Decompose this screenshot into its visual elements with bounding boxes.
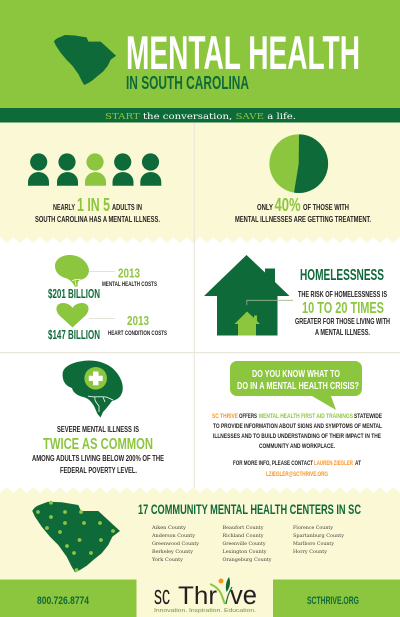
statistic text: 1 in 5: 1 IN 5 — [77, 195, 110, 215]
label: 2013 mental health costs: 2013 — [118, 266, 140, 280]
value: $147 billion: $147 BILLION — [48, 327, 100, 342]
label: 2013 heart condition costs — [108, 313, 167, 337]
cream background with zigzag edge — [0, 122, 400, 243]
statistic text: 40% — [235, 195, 371, 224]
list: counties column 1: Aiken County — [151, 525, 186, 531]
panel: poverty — [32, 360, 164, 475]
panel: crisis — [212, 361, 382, 478]
speech bubble: DO IN A MENTAL HEALTH CRISIS? — [237, 381, 359, 392]
text: training paragraph: OFFERS — [239, 413, 257, 420]
icon: row of five people — [28, 153, 161, 186]
logo: SC Thrive — [154, 577, 257, 614]
value: $201 billion: $201 BILLION — [48, 286, 100, 301]
footer: phone number — [0, 580, 136, 617]
logo: SC Thrive: sc — [154, 580, 170, 610]
tagline band: START the conversation, SAVE a life. — [105, 112, 296, 122]
list: counties column 2: Lexington County — [222, 549, 267, 555]
list: counties column 3: Florence County — [293, 525, 333, 531]
text: twice as common — [32, 425, 164, 475]
text: contact: AT — [355, 460, 362, 467]
list: counties column 3: Horry County — [293, 549, 327, 555]
list: counties column 1 — [151, 525, 199, 563]
statistic text: 1 in 5 — [35, 195, 160, 224]
list: counties column 2: Richland County — [222, 533, 264, 539]
statistic text: 40%: OF THOSE WITH — [303, 203, 349, 212]
statistic text: 1 in 5: NEARLY — [53, 203, 75, 212]
list: counties column 2: Greenville County — [222, 541, 266, 547]
list: counties column 3: Spartanburg County — [293, 533, 344, 539]
text: twice as common: AMONG ADULTS LIVING BELOW 200% OF THE — [32, 454, 164, 463]
text: training paragraph: SC THRIVE — [212, 413, 238, 420]
panel: 1 in 5 adults — [28, 153, 161, 224]
list: counties column 2: Orangeburg County — [222, 557, 272, 563]
speech bubble — [230, 361, 362, 410]
panel: header — [0, 0, 400, 108]
text: contact: FOR MORE INFO, PLEASE CONTACT — [233, 460, 314, 467]
label: 2013 mental health costs — [102, 266, 157, 288]
subtitle: IN SOUTH CAROLINA — [126, 73, 249, 93]
text: twice as common: FEDERAL POVERTY LEVEL. — [60, 466, 137, 475]
tagline band — [0, 108, 400, 122]
icon: brain — [55, 255, 89, 287]
statistic text: 1 in 5: ADULTS IN — [112, 203, 142, 212]
text: twice as common: SEVERE MENTAL ILLNESS IS — [57, 425, 139, 434]
footer: website: SCTHRIVE.ORG — [307, 595, 359, 607]
statistic text: 40%: ONLY — [257, 203, 273, 212]
icon: brain with medical cross — [63, 360, 123, 418]
speech bubble: DO YOU KNOW WHAT TO — [252, 369, 340, 380]
panel: homelessness — [204, 255, 390, 337]
icon: heart — [56, 303, 89, 328]
text: training paragraph — [212, 413, 382, 450]
icon: map with center dots — [32, 501, 120, 572]
icon: house — [204, 255, 293, 336]
list: counties column 1: Greenwood County — [152, 541, 199, 547]
icon: thrive figure — [210, 577, 232, 604]
pie chart — [269, 134, 328, 193]
footer: phone number: 800.726.8774 — [37, 595, 90, 607]
text: contact: LZIEGLER@SCTHRIVE.ORG — [266, 471, 328, 478]
logo: SC Thrive: ve — [230, 580, 257, 610]
footer: website — [273, 580, 400, 617]
text: contact: LAUREN ZIEGLER — [314, 460, 353, 467]
list: counties column 2: Beaufort County — [222, 525, 264, 531]
text: training paragraph: STATEWIDE — [354, 413, 382, 420]
text: homelessness statistic: A MENTAL ILLNESS. — [315, 328, 370, 337]
statistic text: 40%: 40% — [274, 195, 300, 215]
text: contact — [233, 460, 362, 478]
list: counties column 1: York County — [151, 557, 183, 563]
logo: SC Thrive: Innovation. Inspiration. Education. — [154, 608, 257, 614]
text: homelessness statistic — [295, 290, 390, 337]
label: 2013 heart condition costs: 2013 — [127, 313, 149, 328]
label: 2013 heart condition costs: HEART CONDITION COSTS — [108, 330, 167, 337]
panel: 40% getting treatment — [235, 134, 371, 224]
list: counties column 1: Anderson County — [151, 533, 195, 539]
list: counties column 3: Marlboro County — [293, 541, 334, 547]
text: training paragraph: MENTAL HEALTH FIRST AID TRAININGS — [259, 413, 353, 420]
logo: SC Thrive: Thr — [178, 582, 217, 610]
panel: costs — [48, 255, 167, 342]
statistic text: 1 in 5: SOUTH CAROLINA HAS A MENTAL ILLNESS. — [35, 215, 160, 224]
list: counties column 2 — [222, 525, 272, 563]
list: counties column 3 — [293, 525, 344, 555]
text: twice as common: TWICE AS COMMON — [43, 436, 153, 453]
list: counties column 1: Berkeley County — [152, 549, 193, 555]
panel: community centers — [0, 487, 400, 617]
icon: South Carolina map — [54, 35, 116, 85]
text: training paragraph: COMMUNITY AND WORKPLACE. — [259, 443, 335, 450]
label: 2013 mental health costs: MENTAL HEALTH COSTS — [102, 281, 157, 288]
